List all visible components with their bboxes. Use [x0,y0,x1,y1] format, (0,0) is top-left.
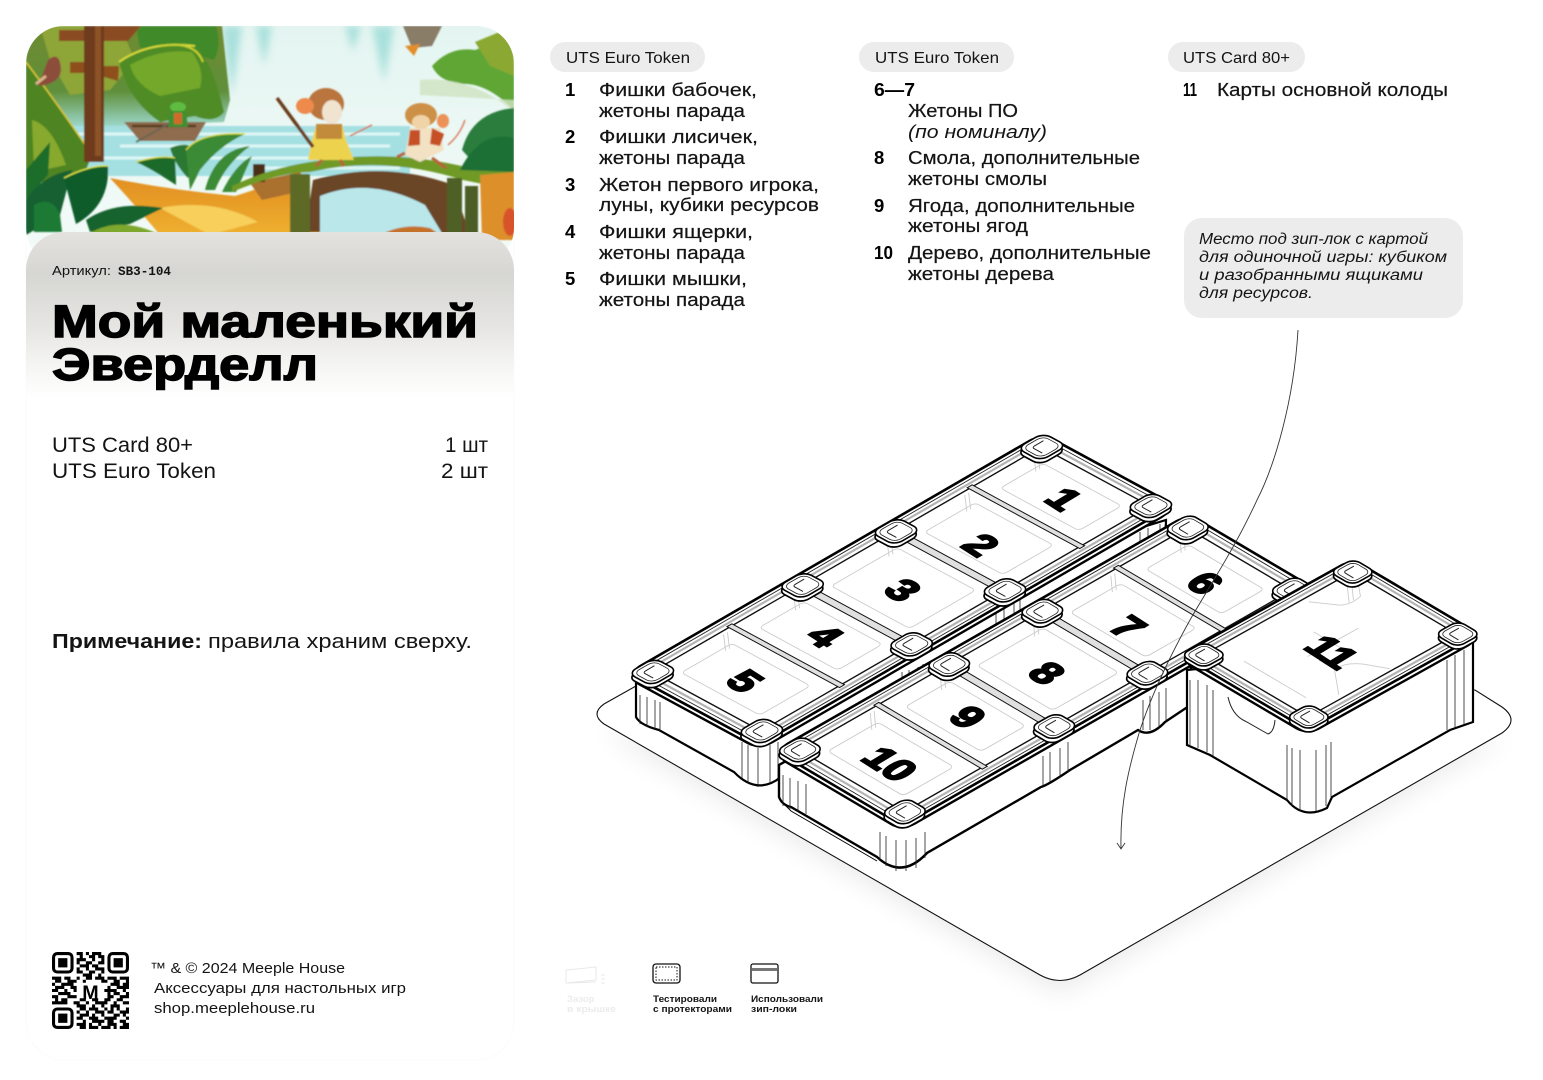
label: lid gap (faded): Зазор [567,994,595,1005]
column 2: token list: 6—7 [874,79,915,100]
box numbers: 4 [796,619,853,654]
box rim lip [1181,564,1479,735]
article number: Артикул: [52,263,111,278]
box rim lip [775,519,1316,831]
box numbers: 9 [939,700,995,735]
box numbers: 6 [1176,566,1232,601]
column 1: token list: жетоны парада [599,289,746,310]
component list: UTS Card 80+ [52,434,193,457]
column 2: token list: жетоны ягод [908,215,1028,236]
box rim [772,514,1321,830]
column 1: token list: 1 [565,79,575,100]
column 2: token list: Жетоны ПО [908,100,1018,121]
article number [52,263,171,279]
column 2: token list: Смола, дополнительные [908,147,1140,168]
component list: UTS Euro Token [52,460,216,483]
box numbers: 3 [874,573,930,608]
handle cutout [1228,697,1275,734]
column 2: token list: 9 [874,195,884,216]
box numbers: 10 [852,741,927,788]
footer credits: ™ & © 2024 Meeple House [150,960,345,977]
right scenery [431,48,514,109]
box numbers: 8 [1018,656,1074,691]
pill: UTS Card 80+ [1168,42,1305,72]
boulders [136,26,219,60]
panel: product card outline [26,26,514,1060]
box body [1187,640,1473,812]
QR code: M [82,982,99,1004]
label: tested with sleeves: Тестировали [653,994,717,1005]
water plants [136,157,176,185]
column 1: token list: 4 [565,221,576,242]
box numbers: 1 [1035,482,1091,517]
column 1: token list: 2 [565,126,575,147]
callout: zip-lock place: Место под зип-лок с картой [1199,231,1428,248]
column 3: card list [1168,42,1448,100]
mouse hero left [308,124,354,160]
box rim [1177,559,1484,734]
title: Эверделл [52,339,318,390]
base tray [597,686,1511,980]
box numbers: 2 [952,528,1008,563]
column 2: token list: Дерево, дополнительные [908,242,1151,263]
column 2: token list: жетоны дерева [908,263,1055,284]
pill: UTS Euro Token: UTS Euro Token [875,50,999,67]
ground path [110,170,320,235]
column 1: token list: луны, кубики ресурсов [599,194,819,215]
column 1: token list: 5 [565,268,575,289]
icon: tested with sleeves [653,964,680,983]
callout: zip-lock place: для одиночной игры: кубиком [1199,249,1447,266]
storage box 11 [1177,559,1484,812]
illustration: game art with mice on a bridge [26,26,517,266]
arrow from callout to zip-lock place [1117,330,1298,849]
label: tested with sleeves [653,994,732,1015]
component list: 1 шт [445,434,488,457]
column 3: card list: Карты основной колоды [1217,79,1448,100]
column 1: token list: Жетон первого игрока, [599,174,819,195]
column 1: token list [550,42,819,310]
callout: zip-lock place: и разобранными ящиками [1199,267,1423,284]
column 1: token list: Фишки лисичек, [599,126,758,147]
column 1: token list: Фишки мышки, [599,268,747,289]
left slope [26,60,92,185]
column 2: token list: 10 [874,242,893,263]
boat and frog [124,122,206,141]
column 2: token list [859,42,1151,284]
sign post [84,26,104,162]
label: zip-locks: Использовали [751,994,823,1005]
column 2: token list: Ягода, дополнительные [908,195,1135,216]
column 1: token list: Фишки бабочек, [599,79,757,100]
callout: zip-lock place [1184,218,1463,318]
article number: SB3-104 [118,265,171,279]
title [52,296,478,390]
footer credits: Аксессуары для настольных игр [154,980,406,997]
column 1: token list: жетоны парада [599,147,746,168]
column 1: token list: жетоны парада [599,242,746,263]
storage group: boxes 6-10 [772,514,1321,871]
box numbers: 5 [716,664,772,699]
column 2: token list: жетоны смолы [908,168,1047,189]
storage group: boxes 1-5 [624,433,1179,787]
column 2: token list: 8 [874,147,884,168]
label: lid gap (faded): в крышке [567,1004,616,1015]
callout: zip-lock place: для ресурсов. [1199,285,1313,302]
label: zip-locks [751,994,823,1015]
box numbers: 7 [1099,610,1155,645]
title: Мой маленький [52,296,478,347]
box body [636,520,1166,787]
column 1: token list: жетоны парада [599,100,746,121]
note: Примечание: [52,631,202,653]
pill: UTS Card 80+: UTS Card 80+ [1183,50,1290,67]
box rim lip [628,439,1174,749]
label: zip-locks: зип-локи [751,1004,797,1015]
component list [52,434,488,483]
bridge [232,156,513,192]
label: lid gap (faded) [567,994,616,1015]
column 1: token list: Фишки ящерки, [599,221,753,242]
box numbers [716,482,1368,788]
QR code [52,954,129,1027]
note [52,631,472,653]
box rim [624,433,1179,749]
left background [26,26,230,126]
footer credits [150,960,406,1017]
note: правила храним сверху. [208,631,472,653]
mouse hero right [405,128,444,162]
foreground leaves [26,142,50,200]
panel: title card with gradient [26,232,514,422]
component list: 2 шт [441,460,488,483]
pill: UTS Euro Token [550,42,705,72]
pill: UTS Euro Token [859,42,1014,72]
icon: lid gap (faded) [566,967,605,983]
box numbers: 11 [1294,630,1368,675]
pill: UTS Euro Token: UTS Euro Token [566,50,690,67]
base tray shadow [604,730,1505,992]
column 3: card list: 11 [1183,79,1197,100]
icon: zip-locks [751,964,778,983]
box body [779,640,1192,871]
label: tested with sleeves: с протекторами [653,1004,732,1015]
column 1: token list: 3 [565,174,575,195]
column 2: token list: (по номиналу) [908,121,1047,142]
footer credits: shop.meeplehouse.ru [154,1000,315,1017]
